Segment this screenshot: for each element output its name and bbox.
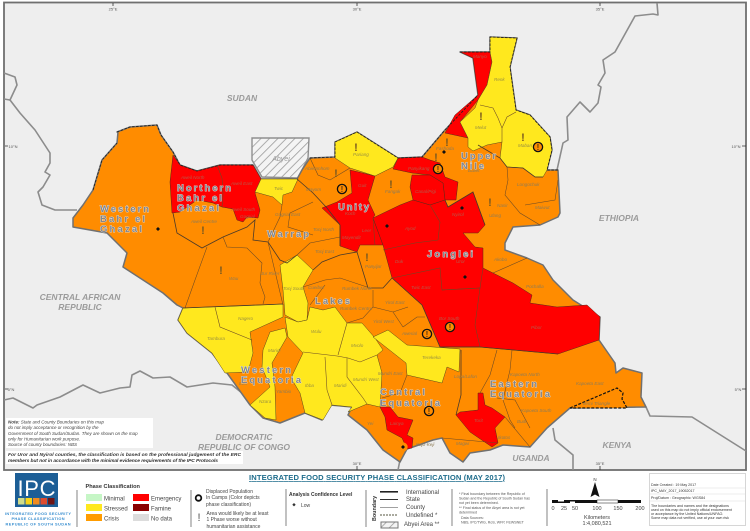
Panyikang	[393, 157, 458, 200]
humanitarian assistance exclamation marks: !	[434, 152, 438, 164]
boundary notes and data sources: determined	[459, 510, 477, 514]
county name labels: Abiemnhom	[304, 166, 330, 171]
graticule ticks and labels: 5°N	[735, 387, 741, 392]
graticule ticks and labels: 30°E	[353, 6, 362, 12]
state name labels	[100, 151, 551, 409]
county name labels: Manyo	[473, 54, 487, 59]
legend: analysis confidence: Low	[301, 503, 311, 509]
state name labels: Ghazal	[177, 203, 219, 214]
map info box: The boundaries and names and the designations	[651, 504, 729, 508]
county name labels: Leer	[362, 228, 372, 233]
displaced population camp markers: !	[428, 407, 430, 416]
scale bar and north arrow: 50	[572, 506, 578, 512]
Lakes: Rumbek	[280, 255, 313, 322]
boundary notes and data sources: Sudan and the Republic of South Sudan has	[459, 496, 530, 500]
state name labels: Lakes	[315, 296, 350, 307]
county name labels: Kapoeta North	[510, 372, 540, 377]
state name labels: Upper	[461, 151, 496, 162]
county name labels: Tonj East	[315, 249, 335, 254]
legend: phase classification: Famine	[151, 506, 172, 512]
county name labels: Twic	[274, 186, 284, 191]
map info box: IPC_MAY_2017_19052017	[651, 489, 694, 493]
map info box: used on this map do not imply official endorsement	[651, 508, 732, 512]
boundary notes and data sources: NBS, IPC/TWG, RoS, WFP, FEWSNET	[461, 520, 525, 524]
humanitarian assistance exclamation marks: !	[445, 137, 449, 149]
state name labels: Bahr el	[100, 214, 145, 225]
county name labels: Ezo	[239, 381, 247, 386]
legend: camp and assistance symbols: humanitarian assistance	[206, 524, 261, 530]
title: INTEGRATED FOOD SECURITY PHASE CLASSIFICATION (MAY 2017)	[249, 473, 505, 482]
boundary notes and data sources: * Final boundary between the Republic of	[459, 492, 525, 496]
country labels: REPUBLIC OF CONGO	[198, 442, 290, 452]
map info box: Some map data not verified, use at your own risk	[651, 516, 729, 520]
county name labels: Mundri West	[353, 377, 379, 382]
county name labels: Magwi	[456, 441, 470, 446]
county name labels: Guit	[358, 183, 367, 188]
county name labels: Mvolo	[351, 343, 364, 348]
county name labels: Canal/Pigi	[415, 189, 437, 194]
scale bar and north arrow: 1:4,080,521	[582, 521, 612, 527]
county name labels: Mundri East	[378, 371, 403, 376]
displaced population camp markers: !	[426, 330, 428, 339]
county name labels: Maban	[518, 143, 532, 148]
county name labels: Rumbek North	[342, 286, 372, 291]
state name labels: Unity	[338, 202, 370, 213]
legend: boundary: Abyei Area **	[404, 522, 440, 528]
state name labels: Ghazal	[100, 224, 142, 235]
county name labels: Pochalla	[526, 284, 544, 289]
note box: Source of county boundaries: NBS	[8, 442, 77, 447]
legend: camp and assistance symbols: phase classification)	[206, 502, 251, 508]
note box: only for Humanitarian work purpose.	[8, 436, 80, 442]
county name labels: Gogrial East	[275, 212, 301, 217]
legend: boundary: International	[406, 490, 439, 496]
scale bar and north arrow: 100	[592, 506, 602, 512]
humanitarian assistance exclamation marks: !	[479, 111, 483, 123]
displaced population camp markers: !	[449, 323, 451, 332]
county name labels: Aweil East	[230, 181, 253, 186]
country labels: REPUBLIC	[58, 302, 103, 312]
county name labels: Nyirol	[452, 212, 465, 217]
state name labels: Jonglei	[427, 249, 473, 260]
legend: phase classification: Crisis	[104, 516, 119, 522]
county name labels: Yambio	[276, 389, 292, 394]
legend: boundary: Undefined *	[406, 513, 438, 519]
county name labels: Panyijar	[365, 264, 382, 269]
legend: phase classification: Phase Classification	[86, 484, 140, 490]
county name labels: Pibor	[531, 325, 542, 330]
legend: camp and assistance symbols: In Camps (Color depicts	[206, 495, 260, 501]
legend: camp and assistance symbols: Area would likely be at least	[206, 511, 269, 517]
county and state boundaries	[173, 105, 558, 447]
uror and nyirol note: For Uror and Nyirol counties, the classification is based on the professional judgement of the ERC	[8, 452, 241, 458]
displaced population camp markers: !	[341, 185, 343, 194]
county name labels: Tonj South	[283, 286, 305, 291]
legend: camp and assistance symbols	[196, 489, 269, 530]
county name labels: Nasir	[497, 203, 508, 208]
county name labels: Tonj North	[313, 227, 334, 232]
graticule ticks and labels: 25°E	[109, 6, 118, 12]
county name labels: Wau	[229, 276, 239, 281]
scale bar and north arrow	[551, 477, 645, 527]
abyei area	[252, 138, 309, 178]
Lainya	[380, 407, 413, 449]
state name labels: Northern	[177, 183, 231, 194]
legend: analysis confidence	[289, 492, 353, 509]
displaced population camp markers: !	[437, 165, 439, 174]
county name labels: Ibba	[305, 383, 314, 388]
county name labels: Twic East	[411, 285, 431, 290]
Pariang	[335, 132, 398, 176]
humanitarian assistance exclamation marks	[201, 111, 525, 277]
state name labels: Equatoria	[241, 375, 302, 386]
graticule ticks and labels: 30°E	[353, 461, 362, 466]
emergency counties (red)	[170, 52, 600, 449]
state name labels: Warrap	[267, 229, 309, 240]
boundary notes and data sources: Data Sources:	[461, 516, 484, 520]
Ezo / Nzara strip	[250, 328, 287, 420]
county name labels: Jur River	[260, 271, 280, 276]
Wulu Mvolo Ibba Maridi Mundri West	[285, 307, 383, 420]
displaced population camp markers	[337, 142, 543, 451]
county name labels: Ikotos	[498, 435, 511, 440]
county name labels: Budi	[517, 419, 527, 424]
county name labels: Cueibet	[308, 285, 325, 290]
scale bar and north arrow: 150	[613, 506, 623, 512]
county name labels: Gogrial	[240, 214, 256, 219]
note box: Government of South Sudan/Sudan. They are shown on the map	[8, 431, 138, 436]
graticule ticks and labels: 10°N	[732, 144, 741, 149]
scale bar and north arrow: 200	[635, 506, 645, 512]
abyei area: Abyei	[271, 156, 290, 163]
county name labels: Fangak	[385, 189, 401, 194]
map info box: or acceptance by the United Nations/UNFAO.	[651, 512, 723, 516]
legend: boundary: County	[406, 505, 425, 511]
legend: boundary: State	[406, 497, 421, 503]
county name labels: Torit	[474, 418, 483, 423]
state name labels: Equatoria	[490, 389, 551, 400]
humanitarian assistance exclamation marks: !	[389, 179, 393, 191]
map info box: Proj/Datum : Geographic: WGS84	[651, 496, 705, 500]
legend: phase classification: Emergency	[151, 496, 181, 502]
scale bar and north arrow: N	[593, 477, 597, 482]
scale bar and north arrow: 25	[561, 506, 567, 512]
ipc logo	[5, 473, 71, 526]
humanitarian assistance exclamation marks: !	[488, 197, 492, 209]
legend: phase classification: Minimal	[104, 496, 125, 502]
Jonglei red block	[373, 192, 600, 354]
county name labels: Wulu	[311, 329, 322, 334]
state name labels: Central	[380, 387, 425, 398]
county name labels: Aweil South	[230, 207, 256, 212]
county name labels: Duk	[395, 259, 404, 264]
boundary notes and data sources: not yet been determined.	[459, 501, 499, 505]
county name labels: Nzara	[259, 399, 272, 404]
country labels: CENTRAL AFRICAN	[40, 292, 121, 302]
state name labels: Equatoria	[380, 398, 441, 409]
scale bar and north arrow: 0	[551, 506, 555, 512]
graticule ticks and labels: 10°N	[9, 144, 18, 149]
legend: camp and assistance symbols: Displaced Population	[206, 489, 253, 495]
ipc logo: PHASE CLASSIFICATION	[12, 516, 65, 521]
footer dividers	[77, 489, 547, 527]
uror and nyirol note: members but not in accordance with the minimal evidence requirements of the IPC Protocols	[8, 458, 218, 464]
Renk Melut Maban	[460, 37, 552, 177]
boundary notes and data sources: ** Final status of the Abyei area is not yet	[459, 506, 525, 510]
county name labels: Maridi	[334, 383, 347, 388]
Twic	[255, 179, 298, 205]
county name labels: Nagero	[238, 316, 254, 321]
county name labels: Kapoeta East	[576, 381, 604, 386]
county name labels: Melut	[475, 125, 487, 130]
country labels: DEMOCRATIC	[216, 432, 273, 442]
county name labels: Akobo	[493, 257, 507, 262]
displaced population camp markers: !	[537, 143, 539, 152]
uror and nyirol note	[6, 451, 243, 464]
humanitarian assistance exclamation marks: !	[219, 265, 223, 277]
county name labels: Kajo-Keji	[416, 442, 435, 447]
county name labels: Terekeka	[422, 355, 441, 360]
map info box	[650, 474, 746, 526]
county name labels: Aweil North	[180, 175, 205, 180]
county name labels: Rumbek Centre	[340, 306, 373, 311]
Canal Pigi	[410, 175, 445, 205]
county name labels: Awerial	[401, 331, 418, 336]
graticule ticks and labels: 35°E	[596, 461, 605, 466]
country labels: UGANDA	[512, 453, 550, 463]
country labels: ETHIOPIA	[599, 213, 639, 223]
county name labels: Ayod	[404, 226, 416, 231]
county name labels: Maridi	[268, 348, 281, 353]
state name labels: Bahr el	[177, 193, 222, 204]
county name labels: Renk	[494, 77, 505, 82]
note box: Note: State and County Boundaries on this map	[8, 420, 105, 424]
county name labels: Bor South	[439, 316, 460, 321]
legend: phase classification: Stressed	[104, 506, 128, 512]
ipc logo: INTEGRATED FOOD SECURITY	[5, 511, 71, 516]
legend: analysis confidence: Analysis Confidence Level	[289, 492, 353, 498]
ipc logo: IPC	[18, 476, 56, 501]
county name labels: Mayendit	[342, 235, 361, 240]
stressed counties (yellow)	[178, 37, 552, 420]
humanitarian assistance exclamation marks: !	[365, 252, 369, 264]
state name labels: Eastern	[490, 379, 537, 390]
county name labels: Ulang	[489, 213, 501, 218]
county name labels: Fashoda	[436, 146, 454, 151]
Terekeka	[373, 330, 460, 383]
county name labels: Kapoeta South	[521, 408, 552, 413]
note box: do not imply acceptance or recognition by the	[8, 425, 99, 430]
legend: boundary: Boundary	[372, 496, 378, 521]
country labels: KENYA	[602, 440, 632, 450]
county name labels: Yirol East	[385, 300, 405, 305]
country labels	[40, 93, 639, 463]
humanitarian assistance exclamation marks: !	[334, 168, 338, 180]
humanitarian assistance exclamation marks: !	[201, 225, 205, 237]
county name labels: Yirol West	[373, 319, 394, 324]
humanitarian assistance exclamation marks: !	[521, 132, 525, 144]
legend: camp and assistance symbols: !	[197, 512, 201, 524]
county name labels	[180, 54, 604, 447]
undefined boundary: dashed northern border	[93, 37, 558, 190]
state name labels: Western	[241, 365, 291, 376]
state name labels: Western	[100, 204, 149, 215]
legend: boundary	[372, 490, 440, 528]
boundary notes and data sources	[459, 492, 530, 524]
Tambura and Nagero	[178, 304, 283, 373]
low confidence markers	[156, 150, 467, 449]
country labels: SUDAN	[227, 93, 258, 103]
ilemi triangle	[570, 388, 627, 408]
county name labels: Baliet	[468, 168, 480, 173]
county name labels: Uror	[456, 259, 465, 264]
Guit Koch Leer Mayendit	[322, 170, 383, 252]
state name labels: Nile	[461, 161, 484, 172]
county name labels: Pariang	[353, 152, 369, 157]
scale bar and north arrow: Kilometers	[584, 515, 610, 521]
county name labels: Lopa/Lafon	[454, 374, 477, 379]
graticule ticks and labels: 35°E	[596, 6, 605, 12]
map info box: Date Created : 19 May 2017	[651, 483, 696, 487]
county name labels: Tambura	[207, 336, 225, 341]
county name labels: Longochuk	[517, 182, 540, 187]
county name labels: Aweil Centre	[190, 219, 217, 224]
county name labels: Lainya	[390, 421, 404, 426]
note box	[6, 418, 153, 448]
legend: camp and assistance symbols: 1 Phase worse without	[206, 517, 257, 523]
Torit	[456, 393, 505, 447]
country base: crisis phase (orange)	[73, 37, 646, 462]
county name labels: Yei	[367, 421, 374, 426]
legend: phase classification	[86, 484, 181, 522]
ipc logo: REPUBLIC OF SOUTH SUDAN	[6, 522, 71, 526]
humanitarian assistance exclamation marks: !	[354, 142, 358, 154]
graticule ticks and labels: 5°N	[8, 387, 14, 392]
ilemi triangle: Ilemi Triangle	[583, 401, 611, 406]
county name labels: Mayom	[306, 187, 321, 192]
Northern Bahr el Ghazal	[170, 155, 261, 222]
county name labels: Maiwut	[535, 205, 550, 210]
county name labels: Koch	[345, 211, 356, 216]
Manyo and Fashoda	[445, 52, 492, 138]
legend: phase classification: No data	[151, 516, 173, 522]
county name labels: Panyikang	[408, 166, 430, 171]
